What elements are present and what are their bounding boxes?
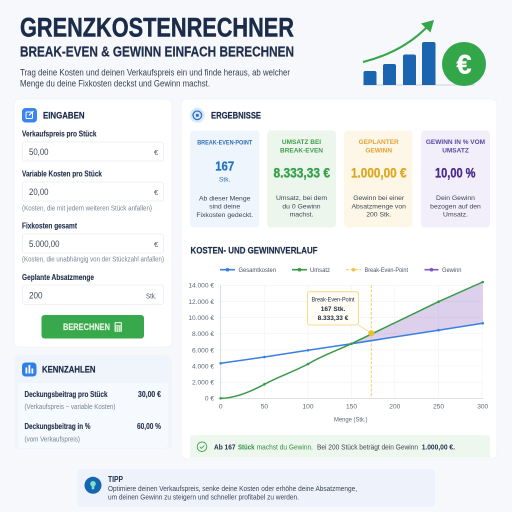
field: planned sales: 200 bbox=[29, 290, 42, 300]
field: planned sales: Stk. bbox=[146, 292, 156, 300]
field: fixed costs: (Kosten, die unabhängig von der Stückzahl anfallen) bbox=[22, 257, 164, 264]
metric: contribution margin percent: 60,00 % bbox=[137, 422, 161, 431]
button: calculate bbox=[42, 315, 144, 338]
line chart bbox=[188, 281, 489, 424]
field: selling price: 50,00 bbox=[29, 146, 48, 157]
card: break-even point: Stk. bbox=[219, 177, 231, 184]
x axis labels: 150 bbox=[346, 404, 357, 410]
card: planned profit: 1.000,00 € bbox=[351, 166, 407, 181]
chart legend: Gesamtkosten bbox=[238, 267, 276, 274]
card: planned profit: Absatzmenge von bbox=[351, 203, 406, 210]
field: variable costs: 20,00 bbox=[29, 186, 48, 197]
field: variable costs: € bbox=[154, 188, 159, 197]
metric: contribution margin percent: Deckungsbeitrag in % bbox=[24, 422, 90, 431]
intro text: Trag deine Kosten und deinen Verkaufspreis ein und finde heraus, ab welcher bbox=[20, 68, 291, 78]
x axis labels: 0 bbox=[219, 404, 223, 410]
break-even tooltip: 167 Stk. bbox=[321, 306, 345, 313]
card: profit margin: GEWINN IN % VOM bbox=[426, 139, 485, 146]
icon: light bulb bbox=[84, 477, 102, 494]
metric: contribution margin per unit: (Verkaufspreis − variable Kosten) bbox=[24, 404, 116, 411]
subtitle: BREAK-EVEN & GEWINN EINFACH BERECHNEN bbox=[20, 44, 294, 60]
card: planned profit: GEWINN bbox=[365, 148, 392, 154]
icon: target bbox=[190, 108, 205, 123]
card: break-even point bbox=[190, 130, 260, 228]
break-even tooltip: 8.333,33 € bbox=[318, 315, 349, 322]
card: revenue at break-even: UMSATZ BEI bbox=[282, 139, 321, 146]
card: planned profit: GEPLANTER bbox=[359, 139, 399, 146]
summary text: 1.000,00 €. bbox=[422, 442, 455, 451]
field: variable costs: Variable Kosten pro Stück bbox=[22, 170, 102, 179]
y axis labels: 6.000 € bbox=[192, 347, 214, 354]
y axis labels: 10.000 € bbox=[188, 315, 214, 322]
revenue line bbox=[219, 281, 484, 400]
panel: key figures bbox=[14, 355, 172, 449]
card: profit margin: bezogen auf den bbox=[430, 203, 481, 210]
icon: bar chart badge bbox=[22, 362, 36, 376]
x axis labels: 100 bbox=[302, 404, 314, 410]
panel: tip bbox=[77, 469, 435, 507]
heading: inputs: EINGABEN bbox=[43, 110, 85, 122]
metric: contribution margin percent bbox=[24, 422, 161, 444]
summary text: Bei 200 Stück beträgt dein Gewinn bbox=[317, 442, 418, 451]
card: profit margin: 10,00 % bbox=[435, 166, 476, 181]
y axis labels: 14.000 € bbox=[188, 283, 214, 290]
header: title and intro bbox=[20, 12, 294, 90]
chart legend: Umsatz bbox=[310, 267, 331, 274]
x axis labels: 250 bbox=[433, 404, 444, 410]
field: fixed costs: € bbox=[154, 240, 159, 249]
y axis labels: 2.000 € bbox=[192, 380, 214, 387]
callout: result summary bbox=[190, 435, 490, 458]
field: variable costs bbox=[22, 170, 164, 212]
tip text: um deinen Gewinn zu steigern und schneller profitabel zu werden. bbox=[108, 492, 299, 502]
x axis labels: 300 bbox=[477, 404, 489, 410]
y axis labels: 0 € bbox=[205, 396, 214, 403]
icon: rising bar chart with euro coin: € bbox=[456, 50, 472, 80]
metric: contribution margin per unit: 30,00 € bbox=[138, 390, 161, 399]
icon: check circle bbox=[197, 442, 207, 452]
y axis labels: 8.000 € bbox=[192, 331, 214, 338]
heading: key figures: KENNZAHLEN bbox=[42, 364, 96, 376]
intro text: Menge du deine Fixkosten deckst und Gewinn machst. bbox=[20, 78, 210, 90]
chart legend bbox=[220, 267, 462, 274]
field: selling price bbox=[22, 130, 164, 161]
summary text: Ab 167 bbox=[214, 442, 236, 451]
panel: results bbox=[181, 99, 497, 459]
card: planned profit: Gewinn bei einer bbox=[353, 195, 405, 202]
break-even tooltip: Break-Even-Point bbox=[312, 296, 355, 304]
field: fixed costs: 5.000,00 bbox=[29, 238, 60, 249]
card: break-even point: Fixkosten gedeckt. bbox=[196, 212, 253, 219]
metric: contribution margin per unit: Deckungsbeitrag pro Stück bbox=[24, 390, 108, 399]
total cost line bbox=[219, 322, 484, 365]
break-even vertical line bbox=[370, 285, 372, 398]
x axis labels: 200 bbox=[389, 404, 401, 410]
title: GRENZKOSTENRECHNER bbox=[20, 12, 294, 42]
field: selling price: Verkaufspreis pro Stück bbox=[22, 130, 97, 139]
field: selling price: € bbox=[154, 148, 159, 157]
card: revenue at break-even bbox=[267, 130, 336, 228]
card: break-even point: sind deine bbox=[209, 204, 240, 211]
card: profit margin bbox=[421, 130, 490, 228]
card: revenue at break-even: Umsatz, bei dem bbox=[276, 195, 327, 202]
tip heading: TIPP bbox=[108, 475, 124, 484]
summary text: machst du Gewinn. bbox=[257, 442, 313, 451]
icon: rising bar chart with euro coin bbox=[363, 20, 486, 86]
chart legend: Gewinn bbox=[442, 267, 462, 274]
summary text bbox=[214, 442, 455, 451]
x axis labels bbox=[219, 404, 489, 410]
card: profit margin: Dein Gewinn bbox=[436, 195, 475, 202]
card: revenue at break-even: BREAK-EVEN bbox=[280, 148, 323, 154]
chart legend: Break-Even-Point bbox=[364, 267, 408, 274]
tip text: Optimiere deinen Verkaufspreis, senke deine Kosten oder erhöhe deine Absatzmenge, bbox=[108, 484, 357, 493]
field: variable costs: (Kosten, die mit jedem weiteren Stück anfallen) bbox=[22, 205, 152, 212]
field: fixed costs: Fixkosten gesamt bbox=[22, 221, 77, 230]
heading: chart: KOSTEN- UND GEWINNVERLAUF bbox=[190, 245, 318, 256]
metric: contribution margin percent: (vom Verkaufspreis) bbox=[24, 436, 80, 444]
card: break-even point: 167 bbox=[215, 158, 234, 173]
card: revenue at break-even: du 0 Gewinn bbox=[282, 203, 321, 210]
panel: inputs bbox=[14, 99, 172, 347]
card: break-even point: BREAK-EVEN-POINT bbox=[197, 140, 252, 146]
y axis labels: 12.000 € bbox=[188, 299, 214, 306]
card: profit margin: UMSATZ bbox=[442, 148, 469, 154]
field: fixed costs bbox=[22, 221, 164, 264]
profit area bbox=[351, 282, 483, 344]
card: planned profit bbox=[344, 130, 412, 228]
card: revenue at break-even: 8.333,33 € bbox=[274, 166, 330, 181]
metric: contribution margin per unit bbox=[24, 390, 161, 411]
card: revenue at break-even: machst. bbox=[290, 212, 314, 218]
field: planned sales: Geplante Absatzmenge bbox=[22, 273, 94, 282]
heading: results: ERGEBNISSE bbox=[211, 110, 261, 122]
break-even tooltip bbox=[308, 292, 358, 325]
x axis labels: 50 bbox=[261, 404, 268, 410]
summary text: Stück bbox=[238, 442, 255, 451]
card: profit margin: Umsatz. bbox=[443, 212, 468, 218]
card: break-even point: Ab dieser Menge bbox=[199, 195, 251, 202]
field: planned sales bbox=[22, 273, 164, 304]
button: calculate: BERECHNEN bbox=[63, 322, 110, 332]
x axis title: Menge (Stk.) bbox=[334, 417, 368, 424]
card: planned profit: 200 Stk. bbox=[366, 212, 391, 218]
icon: edit bbox=[22, 108, 37, 122]
y axis labels: 4.000 € bbox=[192, 363, 214, 370]
y axis labels bbox=[188, 283, 214, 403]
break-even marker bbox=[358, 325, 374, 336]
